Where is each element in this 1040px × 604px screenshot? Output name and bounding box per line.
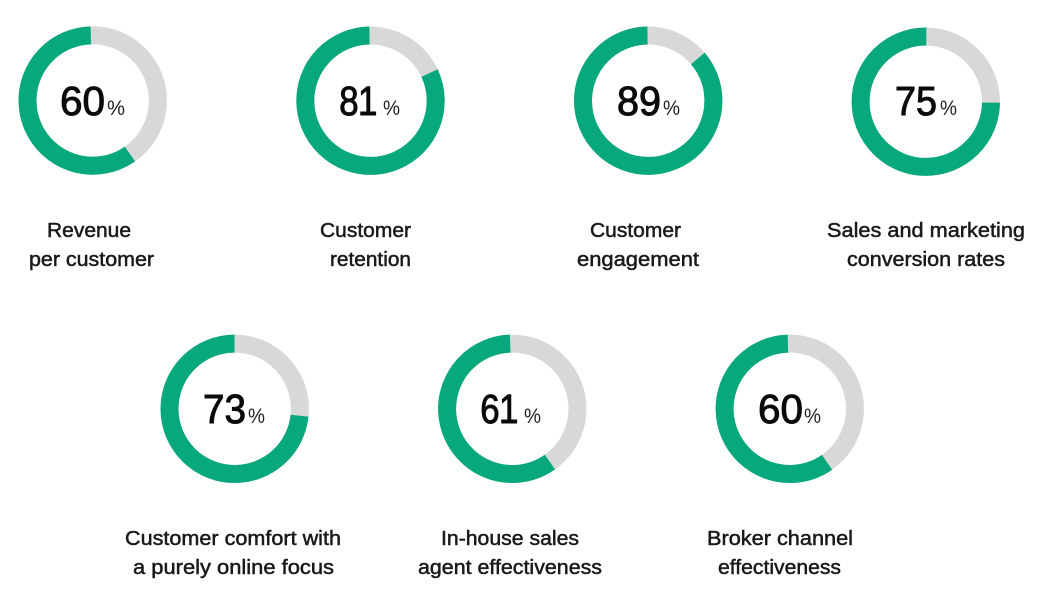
value: 81%: [339, 79, 400, 125]
panel: revenue per customer: [25, 33, 160, 271]
label: customer retention: retention: [330, 249, 411, 271]
value: 60%: 60: [758, 386, 803, 432]
panel: customer comfort: [125, 343, 341, 579]
label: revenue per customer: per customer: [29, 249, 154, 271]
value: 61%: [480, 387, 541, 433]
value: 60%: %: [804, 405, 821, 428]
value: 73%: %: [248, 405, 265, 428]
value: 89%: 89: [617, 78, 661, 124]
label: customer comfort: [125, 528, 341, 579]
panel: sales and marketing conversion rates: [827, 36, 1025, 271]
donut: 60%: [722, 341, 857, 476]
label: broker channel: Broker channel: [707, 528, 853, 550]
label: broker channel: effectiveness: [718, 557, 841, 579]
label: broker channel: [707, 528, 853, 579]
label: customer comfort: Customer comfort with: [125, 528, 341, 550]
donut: 60%: [25, 33, 160, 168]
value: 81%: 81: [339, 79, 377, 125]
value: 81%: %: [383, 97, 400, 120]
donut: 89%: [582, 34, 715, 167]
label: customer retention: Customer: [320, 220, 411, 242]
value: 75%: 75: [895, 78, 937, 124]
label: customer comfort: a purely online focus: [133, 557, 334, 579]
label: in-house sales: [418, 528, 602, 579]
label: sales and marketing conversion rates: Sales and marketing: [827, 220, 1025, 242]
donut: 75%: [861, 36, 991, 167]
label: revenue per customer: [29, 220, 154, 271]
value: 60%: 60: [60, 78, 105, 124]
label: in-house sales: agent effectiveness: [418, 557, 602, 579]
value: 61%: %: [524, 405, 541, 428]
value: 89%: %: [663, 97, 680, 120]
panel: customer engagement: [577, 34, 715, 271]
label: sales and marketing conversion rates: [827, 220, 1025, 271]
label: customer engagement: engagement: [577, 249, 699, 271]
value: 75%: %: [940, 97, 957, 120]
donut: 81%: [304, 34, 437, 167]
value: 73%: 73: [203, 386, 246, 432]
panel: in-house sales: [418, 341, 602, 579]
label: revenue per customer: Revenue: [47, 220, 131, 242]
label: customer retention: [320, 220, 411, 271]
donut: 61%: [445, 341, 580, 477]
label: customer engagement: Customer: [590, 220, 681, 242]
label: sales and marketing conversion rates: conversion rates: [847, 249, 1005, 271]
label: in-house sales: In-house sales: [441, 528, 579, 550]
value: 60%: %: [107, 97, 125, 120]
donut: 73%: [169, 343, 301, 475]
panel: broker channel: [707, 341, 857, 579]
panel: customer retention: [304, 34, 437, 271]
label: customer engagement: [577, 220, 699, 271]
value: 61%: 61: [480, 387, 518, 433]
